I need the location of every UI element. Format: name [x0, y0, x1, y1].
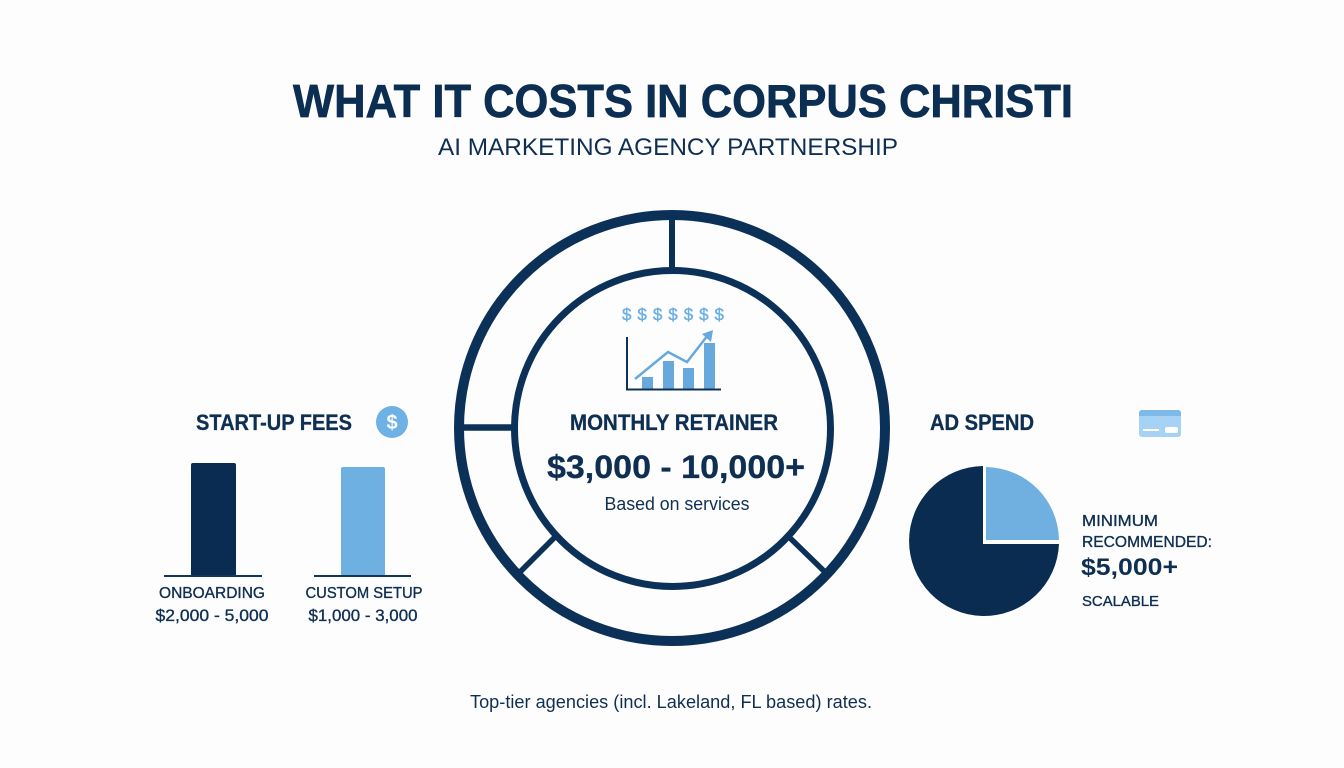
icon: growth bar chart: [627, 330, 721, 390]
icon: dollar coin: $: [386, 412, 398, 434]
subtitle: AI MARKETING AGENCY PARTNERSHIP: [438, 134, 898, 161]
minimum recommended text: MINIMUM: [1082, 513, 1158, 530]
ring dividers: [460, 215, 826, 573]
label: custom setup: CUSTOM SETUP: [306, 585, 422, 602]
pie chart: [909, 466, 1059, 616]
minimum recommended text: $5,000+: [1081, 554, 1178, 581]
retainer note: Based on services: [604, 494, 750, 514]
label: onboarding: $2,000 - 5,000: [156, 606, 268, 625]
bar: onboarding: [164, 463, 262, 576]
panel: start-up fees: [156, 406, 422, 625]
heading: START-UP FEES: [196, 410, 352, 435]
panel: central ring diagram: [459, 215, 885, 641]
icon: dollar coin: [376, 406, 408, 438]
bar: custom setup: [314, 467, 411, 576]
footer note: Top-tier agencies (incl. Lakeland, FL based) rates.: [470, 692, 872, 712]
title: WHAT IT COSTS IN CORPUS CHRISTI: [293, 75, 1073, 127]
label: onboarding: ONBOARDING: [159, 585, 265, 602]
retainer amount: $3,000 - 10,000+: [547, 449, 805, 485]
inner ring: [514, 270, 830, 586]
icon: dollar signs row: $$$$$$$: [622, 305, 725, 324]
outer ring: [459, 215, 885, 641]
label: custom setup: $1,000 - 3,000: [308, 606, 418, 625]
label: custom setup: [306, 585, 422, 625]
panel: ad spend: [909, 410, 1212, 616]
minimum recommended text: RECOMMENDED:: [1082, 534, 1212, 551]
minimum recommended text: SCALABLE: [1082, 593, 1159, 610]
label: onboarding: [156, 585, 268, 625]
icon: credit card: [1139, 410, 1181, 437]
minimum recommended text: [1081, 513, 1212, 610]
retainer heading: MONTHLY RETAINER: [570, 410, 778, 435]
heading: AD SPEND: [930, 410, 1034, 435]
